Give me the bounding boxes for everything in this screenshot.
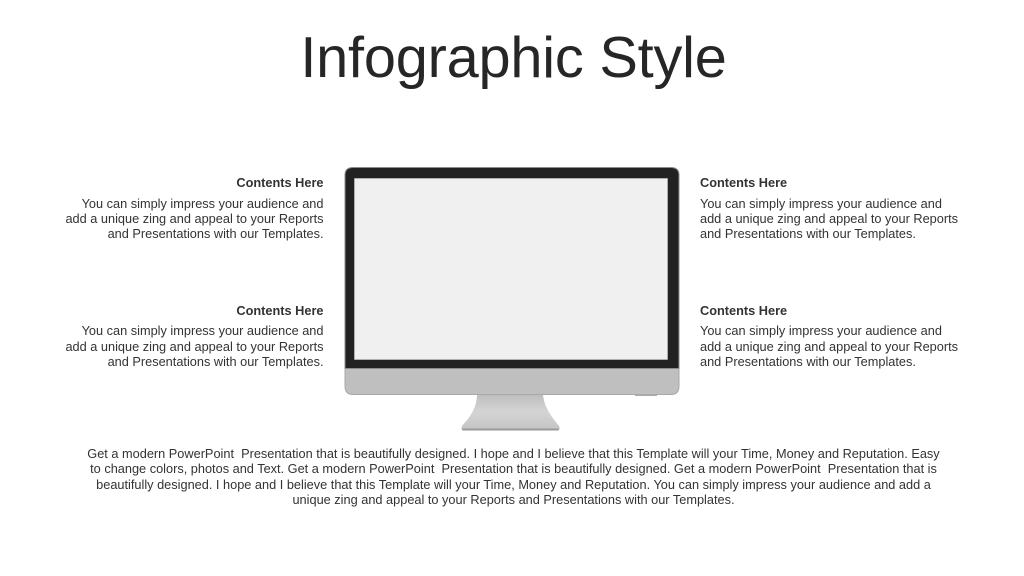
bottom paragraph: unique zing and appeal to your Reports and Presentations with our Templates.: [292, 492, 735, 507]
bottom paragraph: beautifully designed. I hope and I believe that this Template will your Time, Money and Reputation. You can simply impress your audience and add a: [96, 477, 931, 492]
text block: top left: and Presentations with our Templates.: [108, 226, 324, 241]
text block: bottom right: add a unique zing and appeal to your Reports: [700, 339, 958, 354]
text block: bottom left: You can simply impress your audience and: [82, 323, 324, 338]
text block: bottom right: Contents Here: [700, 302, 787, 318]
text block: top right: You can simply impress your audience and: [700, 196, 942, 211]
monitor chin: [345, 368, 679, 394]
text block: top left: [65, 175, 324, 241]
text block: top left: Contents Here: [236, 175, 324, 190]
title: Infographic Style: [300, 26, 727, 90]
monitor bezel: [345, 168, 679, 368]
monitor foot button: [635, 394, 657, 396]
text block: bottom left: add a unique zing and appeal to your Reports: [65, 339, 324, 354]
bottom paragraph: Get a modern PowerPoint Presentation that is beautifully designed. I hope and I believe that this Template will your Time, Money and Reputation. Easy: [87, 446, 940, 461]
bottom paragraph: [87, 446, 940, 507]
text block: top left: You can simply impress your audience and: [82, 196, 324, 211]
monitor stand: [461, 394, 560, 430]
text block: bottom left: and Presentations with our Templates.: [108, 354, 324, 369]
text block: top right: add a unique zing and appeal to your Reports: [700, 211, 958, 226]
text block: bottom right: You can simply impress your audience and: [700, 323, 942, 338]
monitor screen: [354, 178, 668, 360]
text block: top right: [700, 175, 958, 241]
text block: top right: Contents Here: [700, 175, 787, 190]
bottom paragraph: to change colors, photos and Text. Get a modern PowerPoint Presentation that is beautifully designed. Get a modern PowerPoint Presentation that is: [90, 461, 937, 476]
text block: bottom right: [700, 302, 958, 369]
text block: top left: add a unique zing and appeal to your Reports: [65, 211, 324, 226]
text block: bottom right: and Presentations with our Templates.: [700, 354, 916, 369]
text block: bottom left: [65, 302, 324, 369]
text block: bottom left: Contents Here: [236, 302, 324, 318]
text block: top right: and Presentations with our Templates.: [700, 226, 916, 241]
